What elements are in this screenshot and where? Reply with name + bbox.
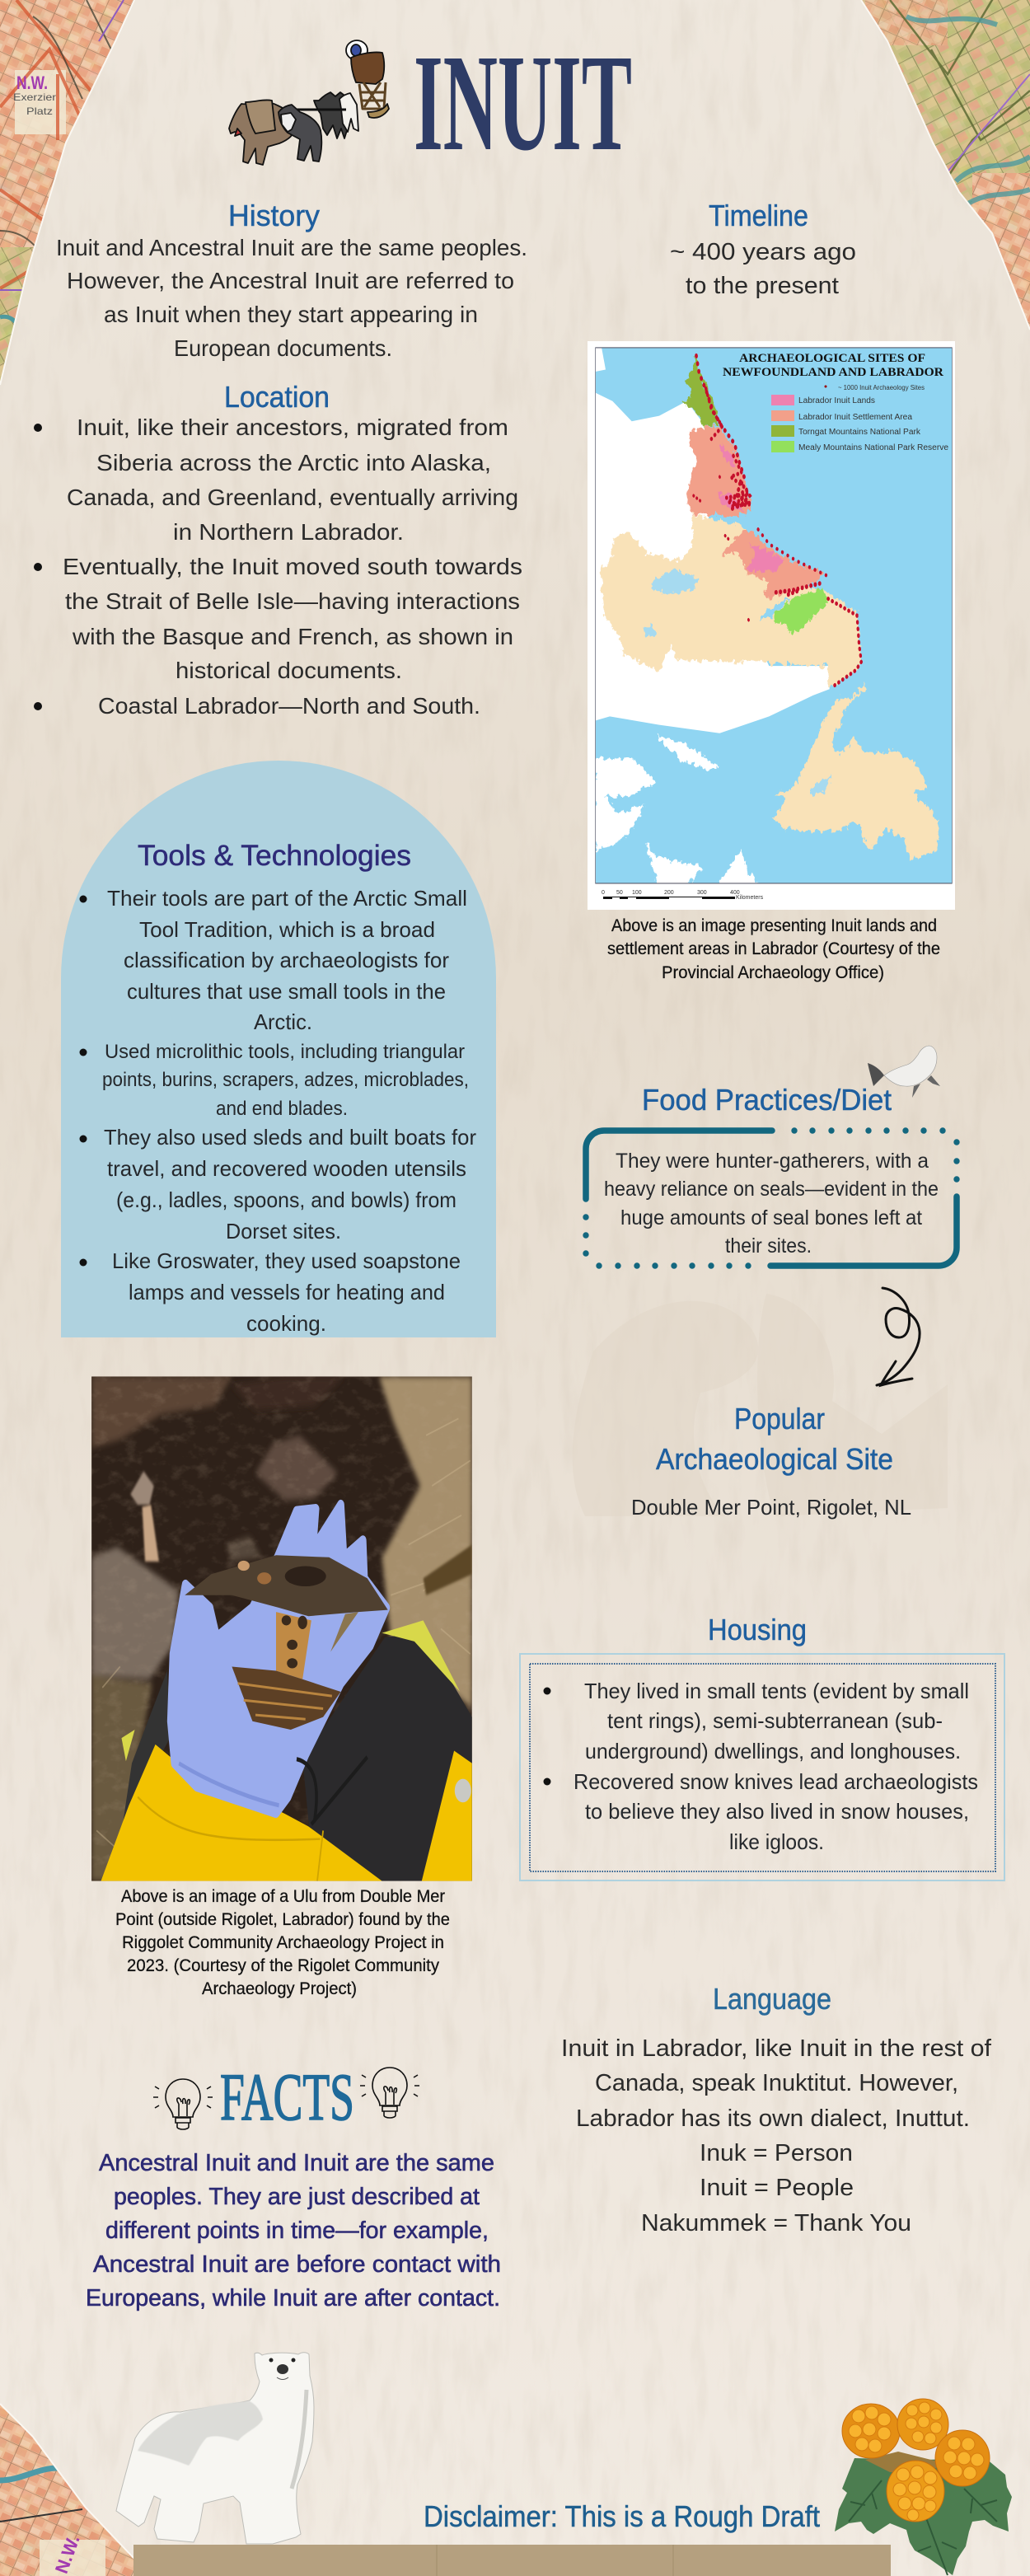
section: popular archaeological site: Archaeological Site bbox=[656, 1442, 893, 1476]
bullet list: Arctic. bbox=[254, 1009, 312, 1034]
bullet list: historical documents. bbox=[176, 658, 402, 683]
photo caption: Archaeology Project) bbox=[202, 1979, 357, 1998]
photo caption: Point (outside Rigolet, Labrador) found by the bbox=[115, 1910, 450, 1929]
arrow: curly bbox=[877, 1288, 920, 1385]
heading: Language bbox=[713, 1982, 831, 2016]
body: However, the Ancestral Inuit are referred to bbox=[67, 268, 514, 293]
map collage: top right corner bbox=[857, 0, 1030, 330]
bullet list: Their tools are part of the Arctic Small bbox=[107, 886, 467, 911]
berries bbox=[842, 2399, 990, 2522]
bullet list: Canada, and Greenland, eventually arriving bbox=[67, 485, 518, 510]
bullet list: Siberia across the Arctic into Alaska, bbox=[96, 450, 491, 475]
bullet list: Used microlithic tools, including triangular bbox=[105, 1041, 465, 1063]
illustration: cloudberries bbox=[835, 2399, 1012, 2575]
heading: Timeline bbox=[709, 199, 808, 232]
heading: Location bbox=[224, 380, 330, 414]
map legend: Labrador Inuit Settlement Area bbox=[798, 413, 912, 422]
body: Inuk = Person bbox=[700, 2140, 853, 2166]
bullet list: Coastal Labrador—North and South. bbox=[98, 693, 480, 719]
bullet list: in Northern Labrador. bbox=[173, 519, 404, 545]
bullet list: classification by archaeologists for bbox=[124, 948, 449, 972]
heading: facts: FACTS bbox=[220, 2059, 354, 2134]
map scale bar: 400 bbox=[730, 890, 740, 896]
bullet list: with the Basque and French, as shown in bbox=[72, 624, 513, 649]
text block: facts: Europeans, while Inuit are after contact. bbox=[86, 2285, 500, 2311]
map frame bbox=[588, 341, 955, 910]
brown lead dog bbox=[229, 102, 294, 165]
heading: Popular bbox=[734, 1402, 825, 1436]
body: their sites. bbox=[725, 1234, 812, 1258]
photo caption: Riggolet Community Archaeology Project in bbox=[122, 1933, 444, 1952]
icon: light bulb right bbox=[360, 2068, 419, 2118]
map collage: top left corner: N.W. bbox=[16, 73, 48, 93]
photo: ulu in gloved hand bbox=[91, 1376, 472, 1881]
body: European documents. bbox=[174, 335, 392, 361]
map scale bar: 100 bbox=[632, 890, 642, 896]
map collage: bottom left corner bbox=[0, 2405, 133, 2576]
map scale bar: 0 bbox=[602, 890, 605, 896]
map collage: bottom left corner: N.W. bbox=[51, 2532, 84, 2576]
driver bbox=[346, 40, 384, 84]
bullet list: cultures that use small tools in the bbox=[127, 979, 446, 1004]
bullet list bbox=[34, 415, 522, 719]
illustration: polar bear bbox=[116, 2353, 314, 2544]
map legend: ~ 1000 Inuit Archaeology Sites bbox=[838, 384, 925, 391]
bullet list: Tool Tradition, which is a broad bbox=[139, 917, 435, 942]
map title: ARCHAEOLOGICAL SITES OF bbox=[739, 352, 925, 365]
bullet list: Like Groswater, they used soapstone bbox=[112, 1248, 461, 1273]
bullet list: tent rings), semi-subterranean (sub- bbox=[607, 1708, 943, 1733]
jacket bbox=[101, 1745, 382, 1881]
map collage: top left corner bbox=[0, 0, 140, 387]
body: Nakummek = Thank You bbox=[641, 2210, 911, 2236]
panel: tools and technologies bbox=[61, 761, 496, 1337]
map legend: Torngat Mountains National Park bbox=[798, 428, 921, 437]
map legend bbox=[771, 384, 948, 452]
bullet list: underground) dwellings, and longhouses. bbox=[585, 1739, 961, 1763]
bullet list: Eventually, the Inuit moved south towards bbox=[63, 554, 522, 579]
icon: seal bbox=[868, 1046, 940, 1098]
bullet list: travel, and recovered wooden utensils bbox=[107, 1156, 466, 1181]
bullet list bbox=[79, 886, 476, 1336]
map scale bar: 300 bbox=[697, 890, 707, 896]
map figure bbox=[588, 341, 955, 910]
heading: History bbox=[228, 199, 320, 232]
bullet list: and end blades. bbox=[216, 1098, 348, 1120]
rear dogs bbox=[314, 92, 350, 138]
text block: facts bbox=[86, 2150, 501, 2311]
bullet list: Inuit, like their ancestors, migrated from bbox=[77, 415, 508, 440]
section: food practices bbox=[583, 1083, 960, 1269]
body bbox=[561, 2035, 992, 2236]
photo caption: 2023. (Courtesy of the Rigolet Community bbox=[127, 1956, 439, 1975]
body: Canada, speak Inuktitut. However, bbox=[595, 2070, 958, 2096]
map caption: Above is an image presenting Inuit lands and bbox=[611, 916, 937, 935]
heading: Food Practices/Diet bbox=[642, 1083, 892, 1117]
icon: dog sled bbox=[229, 40, 389, 165]
bullet list: (e.g., ladles, spoons, and bowls) from bbox=[116, 1187, 456, 1212]
section: timeline bbox=[670, 199, 856, 299]
body: to the present bbox=[686, 273, 839, 299]
body bbox=[670, 239, 856, 299]
section: language bbox=[561, 1982, 992, 2236]
grey lead dog bbox=[279, 105, 321, 162]
body: heavy reliance on seals—evident in the bbox=[604, 1178, 939, 1201]
bullet list: Dorset sites. bbox=[226, 1219, 341, 1244]
map collage: top left corner: Exerzier bbox=[13, 91, 56, 103]
body: Inuit and Ancestral Inuit are the same peoples. bbox=[56, 235, 527, 260]
section: location bbox=[34, 380, 522, 719]
section: housing bbox=[520, 1613, 1004, 1880]
icon: light bulb left bbox=[153, 2079, 213, 2129]
section: history bbox=[56, 199, 527, 361]
body: as Inuit when they start appearing in bbox=[104, 302, 478, 327]
outer border bbox=[520, 1654, 1004, 1880]
map legend: Mealy Mountains National Park Reserve bbox=[798, 443, 948, 452]
bullet list bbox=[544, 1679, 978, 1854]
map legend: Labrador Inuit Lands bbox=[798, 396, 875, 405]
bullet list: cooking. bbox=[246, 1311, 326, 1336]
archaeological site dots bbox=[694, 356, 861, 688]
bullet list: They lived in small tents (evident by small bbox=[584, 1679, 969, 1703]
brown paper strip bbox=[133, 2545, 891, 2576]
map scale bar bbox=[602, 890, 764, 901]
map caption bbox=[607, 916, 940, 982]
bullet list: They also used sleds and built boats for bbox=[104, 1125, 476, 1150]
decorative frame bbox=[583, 1127, 960, 1269]
inner dotted border bbox=[530, 1664, 995, 1871]
map title: NEWFOUNDLAND AND LABRADOR bbox=[723, 366, 943, 379]
heading: Tools & Technologies bbox=[138, 840, 411, 872]
ulu bbox=[185, 1555, 388, 1616]
bullet list: points, burins, scrapers, adzes, microblades, bbox=[102, 1069, 469, 1091]
bullet list: Recovered snow knives lead archaeologists bbox=[574, 1769, 978, 1794]
body: Inuit in Labrador, like Inuit in the rest of bbox=[561, 2035, 992, 2062]
section: popular archaeological site bbox=[631, 1402, 911, 1520]
map scale bar: Kilometers bbox=[736, 895, 764, 901]
body bbox=[56, 235, 527, 361]
map caption: settlement areas in Labrador (Courtesy of the bbox=[607, 939, 940, 958]
map title bbox=[723, 352, 943, 379]
text block: facts: Ancestral Inuit are before contact with bbox=[93, 2251, 501, 2278]
leaves bbox=[835, 2458, 1012, 2575]
bullet list: the Strait of Belle Isle—having interactions bbox=[65, 588, 520, 614]
body: Inuit = People bbox=[700, 2175, 854, 2201]
map drawing bbox=[595, 347, 953, 889]
husks bbox=[865, 2452, 948, 2472]
photo caption bbox=[115, 1887, 450, 1998]
text block: facts: different points in time—for example, bbox=[105, 2218, 489, 2244]
bullet list: to believe they also lived in snow houses, bbox=[585, 1799, 969, 1824]
body: huge amounts of seal bones left at bbox=[620, 1206, 922, 1229]
map caption: Provincial Archaeology Office) bbox=[662, 963, 884, 982]
map collage: top left corner: Platz bbox=[26, 105, 53, 117]
title: INUIT bbox=[414, 26, 632, 180]
body: Labrador has its own dialect, Inuttut. bbox=[576, 2105, 970, 2132]
harness line bbox=[295, 109, 346, 110]
disclaimer: Disclaimer: This is a Rough Draft bbox=[424, 2499, 820, 2533]
body: ~ 400 years ago bbox=[670, 239, 856, 265]
sled bbox=[359, 82, 389, 118]
glove bbox=[171, 1505, 386, 1813]
body bbox=[604, 1150, 939, 1258]
body: They were hunter-gatherers, with a bbox=[616, 1150, 929, 1173]
text block: facts: Ancestral Inuit and Inuit are the same bbox=[99, 2150, 494, 2176]
map scale bar: 50 bbox=[616, 890, 623, 896]
heading: Housing bbox=[708, 1613, 807, 1646]
text block: facts: peoples. They are just described at bbox=[114, 2184, 480, 2210]
map scale bar: 200 bbox=[664, 890, 674, 896]
body: Double Mer Point, Rigolet, NL bbox=[631, 1495, 911, 1520]
trowel bbox=[130, 1471, 154, 1505]
bullet list: lamps and vessels for heating and bbox=[129, 1280, 445, 1304]
photo caption: Above is an image of a Ulu from Double Mer bbox=[121, 1887, 445, 1906]
bullet list: like igloos. bbox=[729, 1829, 824, 1854]
arch shape bbox=[61, 761, 496, 1337]
trousers bbox=[302, 1633, 472, 1881]
